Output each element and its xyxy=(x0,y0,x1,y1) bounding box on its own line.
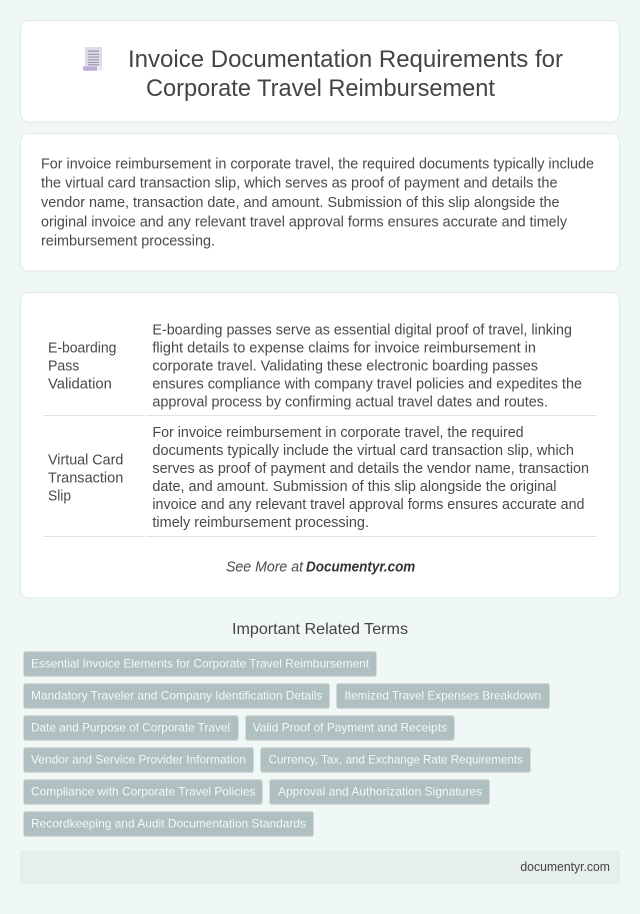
tag xyxy=(24,780,262,804)
row description: E-boarding: E-boarding passes serve as essential digital proof of travel, linking xyxy=(152,322,572,338)
table row: E-boarding Pass Validation xyxy=(43,322,597,416)
tag xyxy=(24,652,376,676)
icon: receipt document xyxy=(83,47,102,71)
link: see more: Documentyr.com xyxy=(306,560,415,576)
tag xyxy=(24,748,254,772)
tag xyxy=(24,716,238,740)
footer: documentyr.com xyxy=(520,860,610,874)
row description: E-boarding xyxy=(152,322,582,410)
tag: Vendor and Service Provider Information xyxy=(31,752,246,766)
text: summary: vendor name, transaction date, and amount. Submission of this slip alongside the xyxy=(41,195,560,211)
row label: Virtual Card Transaction Slip xyxy=(48,452,123,504)
tag xyxy=(270,780,490,804)
tag: Valid Proof of Payment and Receipts xyxy=(253,720,447,734)
tag xyxy=(24,812,314,836)
text: summary: original invoice and any relevant travel approval forms ensures accurate and timely xyxy=(41,214,568,230)
row description: E-boarding: approval process by confirming actual travel dates and routes. xyxy=(152,394,548,410)
heading: important related terms: Important Related Terms xyxy=(232,621,408,638)
tag: Mandatory Traveler and Company Identification Details xyxy=(31,688,322,702)
heading: title xyxy=(128,46,563,102)
tag xyxy=(260,748,530,772)
tag: Compliance with Corporate Travel Policies xyxy=(31,784,256,798)
tag: Date and Purpose of Corporate Travel xyxy=(31,720,230,734)
row label: E-boarding Pass Validation xyxy=(48,340,116,392)
tag: Essential Invoice Elements for Corporate Travel Reimbursement xyxy=(31,656,370,670)
row description: E-boarding: ensures compliance with company travel policies and expedites the xyxy=(152,376,582,392)
row label: Virtual Card Transaction Slip: Slip xyxy=(48,488,71,504)
tag xyxy=(246,716,454,740)
heading: title: Invoice Documentation Requirements for xyxy=(128,46,563,73)
tag list: related terms xyxy=(24,652,550,836)
link: see more: See More at xyxy=(226,560,304,576)
row label: E-boarding Pass Validation: Validation xyxy=(48,376,112,392)
footer xyxy=(20,850,620,884)
link: see more xyxy=(226,560,415,576)
row description: E-boarding: flight details to expense claims for invoice reimbursement in xyxy=(152,340,536,356)
tag: Recordkeeping and Audit Documentation Standards xyxy=(31,816,306,830)
table row: Virtual Card Transaction Slip xyxy=(43,425,597,537)
tag xyxy=(24,684,330,708)
heading: title: Corporate Travel Reimbursement xyxy=(146,75,495,102)
row description: E-boarding: corporate travel. Validating these electronic boarding passes xyxy=(152,358,538,374)
panel: header xyxy=(20,20,620,122)
text: summary: the virtual card transaction slip, which serves as proof of payment and details the xyxy=(41,176,558,192)
row description: virtual card: invoice and any relevant travel approval forms ensures accurate and xyxy=(152,497,584,513)
tag xyxy=(336,684,550,708)
row label: E-boarding Pass Validation: Pass xyxy=(48,358,79,374)
tag: Currency, Tax, and Exchange Rate Requirements xyxy=(269,752,523,766)
text: summary xyxy=(41,156,594,250)
text: summary: reimbursement processing. xyxy=(41,234,215,250)
row description: virtual card: date, and amount. Submission of this slip alongside the original xyxy=(152,479,556,495)
text: summary: For invoice reimbursement in corporate travel, the required documents typically include xyxy=(41,156,594,172)
row label: Virtual Card Transaction Slip: Virtual Card xyxy=(48,452,123,468)
tag: Itemized Travel Expenses Breakdown xyxy=(344,688,541,702)
panel: document table xyxy=(20,292,620,598)
tag: Approval and Authorization Signatures xyxy=(278,784,482,798)
row description: virtual card: timely reimbursement processing. xyxy=(152,515,369,531)
row description: virtual card xyxy=(152,425,589,531)
row label: E-boarding Pass Validation: E-boarding xyxy=(48,340,116,356)
row description: virtual card: documents typically include the virtual card transaction slip, which xyxy=(152,443,574,459)
panel: summary paragraph xyxy=(20,134,620,271)
row label: Virtual Card Transaction Slip: Transaction xyxy=(48,470,123,486)
row description: virtual card: For invoice reimbursement in corporate travel, the required xyxy=(152,425,524,441)
row description: virtual card: serves as proof of payment and details the vendor name, transaction xyxy=(152,461,589,477)
